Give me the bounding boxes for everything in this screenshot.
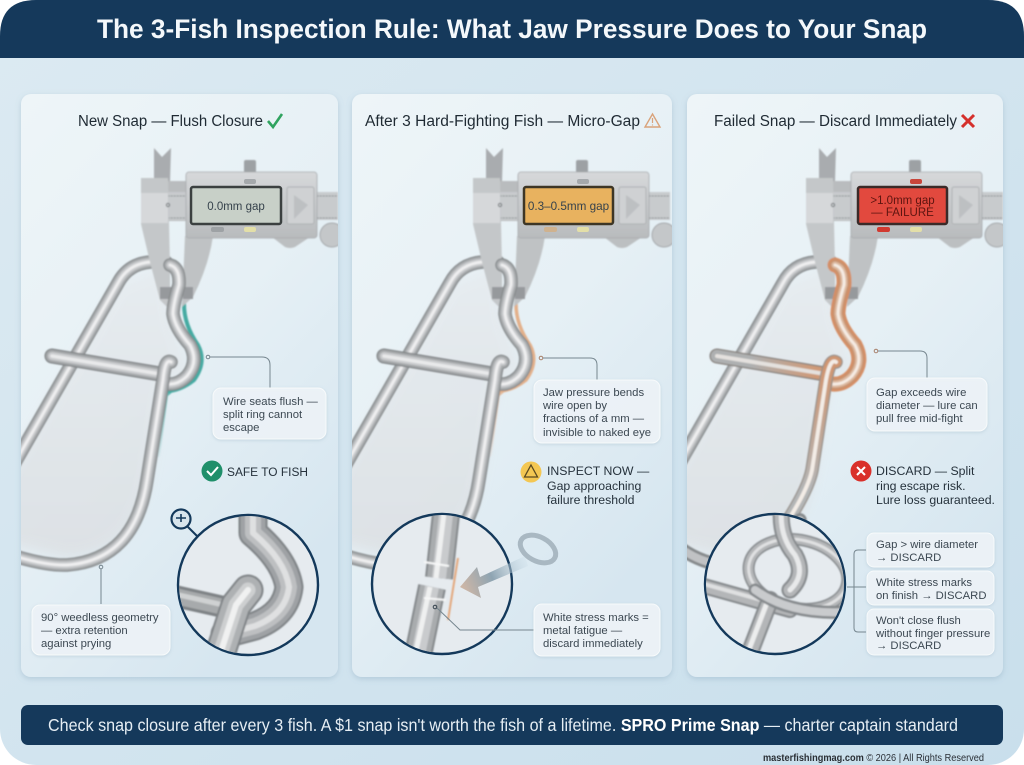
- callout: weedless geometry: [32, 565, 170, 655]
- caliper display: 0.0mm gap: [191, 179, 281, 232]
- checklist: won't close flush: → DISCARD: [876, 640, 941, 652]
- status: discard: ring escape risk.: [876, 479, 966, 493]
- callout: jaw pressure: fractions of a mm —: [543, 413, 645, 425]
- status: discard: DISCARD — Split: [876, 464, 975, 478]
- caliper display: 0.3-0.5mm gap: [524, 179, 613, 232]
- credit line: masterfishingmag.com © 2026 | All Rights Reserved: [763, 753, 984, 764]
- callout: wire seats flush: [206, 355, 326, 439]
- checklist: won't close flush: Won't close flush: [876, 615, 961, 627]
- caliper display: 0.0mm gap: 0.0mm gap: [207, 201, 265, 213]
- title banner: [0, 0, 1024, 58]
- checklist: won't close flush: without finger pressure: [875, 628, 990, 640]
- status: inspect now: [520, 462, 650, 507]
- title banner: The 3-Fish Inspection Rule: What Jaw Pressure Does to Your Snap: [97, 14, 927, 44]
- status: inspect now: INSPECT NOW —: [547, 464, 650, 478]
- status: inspect now: Gap approaching: [547, 479, 642, 493]
- callout: jaw pressure: Jaw pressure bends: [543, 387, 644, 399]
- callout: weedless geometry: against prying: [41, 638, 111, 650]
- checklist: gap over wire diameter: [867, 533, 994, 567]
- magnifier: flush closure detail: [176, 514, 320, 656]
- heading: failed snap: Failed Snap — Discard Immediately: [714, 113, 957, 130]
- callout: jaw pressure: wire open by: [542, 400, 607, 412]
- heading: new snap: New Snap — Flush Closure: [78, 113, 263, 130]
- snap illustration, failed: [655, 148, 1009, 565]
- checklist: gap over wire diameter: → DISCARD: [876, 552, 941, 564]
- takeaway banner: [21, 705, 1003, 745]
- snap illustration, new: [0, 148, 344, 565]
- callout: white stress marks: [433, 604, 660, 656]
- caliper display: over 1.0mm failure: — FAILURE: [871, 207, 934, 219]
- status: discard: Lure loss guaranteed.: [876, 493, 995, 507]
- magnifier: ring escaping through gap: [704, 512, 846, 656]
- status: safe to fish: SAFE TO FISH: [227, 465, 308, 479]
- status: discard: [850, 460, 995, 507]
- callout: white stress marks: metal fatigue —: [543, 625, 623, 637]
- checklist: won't close flush: [867, 609, 994, 655]
- icon: zoom lens: [172, 510, 198, 537]
- takeaway banner: Check snap closure after every 3 fish. A $1 snap isn't worth the fish of a lifetime. SPRO Prime Snap — charter captain standard: [48, 715, 958, 735]
- panel: micro-gap: [322, 94, 676, 677]
- status: safe to fish: [202, 460, 308, 482]
- checklist: white stress marks: on finish → DISCARD: [876, 590, 986, 602]
- caliper display: over 1.0mm failure: >1.0mm gap: [870, 195, 935, 207]
- callout: weedless geometry: — extra retention: [41, 625, 128, 637]
- checklist: gap over wire diameter: Gap > wire diameter: [876, 539, 978, 551]
- callout: jaw pressure: invisible to naked eye: [543, 427, 651, 439]
- snap illustration, micro-gap: [322, 148, 676, 565]
- panel: new snap: [0, 94, 344, 677]
- callout: wire seats flush: Wire seats flush —: [223, 396, 318, 408]
- heading: micro-gap: After 3 Hard-Fighting Fish — Micro-Gap: [365, 113, 640, 130]
- bracket: discard criteria: [847, 550, 866, 632]
- callout: gap exceeds wire diameter: diameter — lure can: [876, 400, 978, 412]
- callout: wire seats flush: split ring cannot: [223, 409, 303, 421]
- callout: gap exceeds wire diameter: [867, 349, 987, 431]
- arrow: ring toward gap: [460, 556, 528, 598]
- icon: split ring: [516, 529, 560, 569]
- callout: jaw pressure: [534, 356, 660, 443]
- caliper display: 0.3-0.5mm gap: 0.3–0.5mm gap: [528, 200, 610, 213]
- caliper display: over 1.0mm failure: [858, 179, 947, 232]
- panel: failed snap: [655, 94, 1009, 677]
- checklist: white stress marks: [867, 571, 994, 605]
- callout: wire seats flush: escape: [223, 422, 259, 434]
- callout: white stress marks: White stress marks =: [543, 612, 649, 624]
- checklist: white stress marks: White stress marks: [876, 577, 972, 589]
- callout: gap exceeds wire diameter: Gap exceeds wire: [876, 387, 966, 399]
- callout: gap exceeds wire diameter: pull free mid-fight: [876, 413, 964, 425]
- magnifier: stress marks detail: [372, 505, 512, 660]
- callout: weedless geometry: 90° weedless geometry: [41, 612, 159, 624]
- callout: white stress marks: discard immediately: [543, 638, 643, 650]
- status: inspect now: failure threshold: [547, 493, 635, 507]
